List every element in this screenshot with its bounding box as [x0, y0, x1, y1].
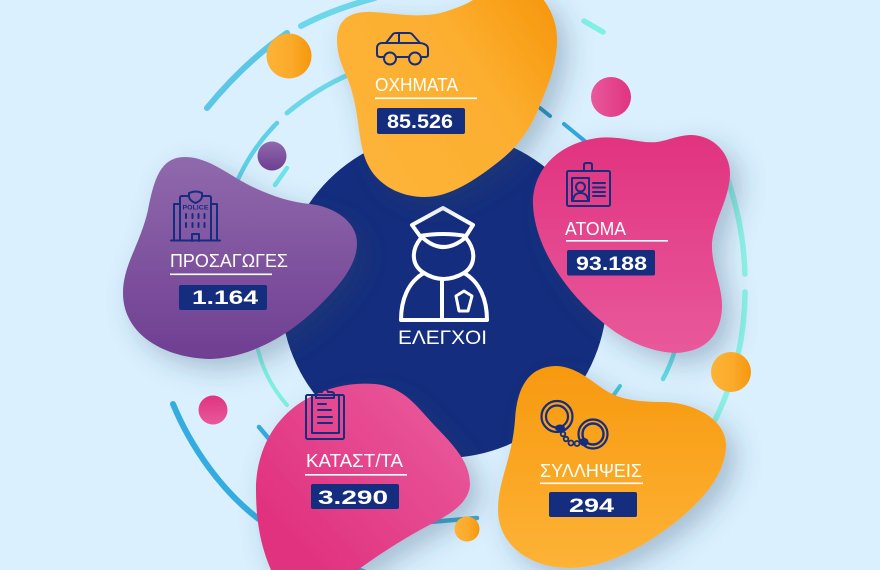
value box: establishments: [311, 484, 399, 509]
panel: establishments: [256, 384, 470, 570]
blob: orange top: [337, 0, 557, 197]
value box: vehicles: [377, 108, 465, 134]
label: establishments: ΚΑΤΑΣΤ/ΤΑ: [306, 451, 403, 471]
blob: pink right: [533, 135, 730, 353]
blob: purple left: [123, 157, 357, 359]
value box: arrests: [549, 492, 637, 517]
value box: persons: 93.188: [576, 254, 647, 275]
icon: handcuffs: [542, 401, 608, 448]
panel: arrests: [498, 366, 726, 568]
central navy circle: [281, 132, 607, 458]
blob: orange bottom: [498, 366, 726, 568]
label: persons: ΑΤΟΜΑ: [565, 219, 626, 239]
dashed rings: [173, 0, 745, 570]
underline: [305, 474, 407, 476]
center label: ΕΛΕΓΧΟΙ: [398, 328, 487, 349]
panel: detentions: [123, 157, 357, 359]
panel: vehicles: [337, 0, 557, 197]
icon: id card: [567, 163, 610, 206]
icon: car: [377, 33, 428, 64]
icon: police officer: [401, 208, 487, 320]
icon: police station: POLICE: [182, 206, 208, 212]
value box: persons: [567, 250, 655, 276]
label: arrests: ΣΥΛΛΗΨΕΙΣ: [540, 461, 642, 481]
label: vehicles: ΟΧΗΜΑΤΑ: [375, 75, 458, 95]
value box: detentions: [179, 285, 267, 310]
value box: establishments: 3.290: [318, 488, 388, 509]
value box: arrests: 294: [569, 496, 615, 517]
decorative dot: pink bottom left: [198, 396, 228, 424]
value box: vehicles: 85.526: [387, 112, 453, 133]
underline: [170, 274, 272, 275]
label: detentions: ΠΡΟΣΑΓΩΓΕΣ: [170, 251, 288, 271]
decorative dot: orange small: [454, 516, 480, 542]
panel: persons: [533, 135, 730, 353]
underline: [375, 98, 477, 99]
decorative dot: orange right: [711, 352, 751, 392]
underline: [566, 240, 668, 242]
decorative dot: orange top left: [266, 34, 312, 78]
underline: [540, 482, 643, 484]
decorative dot: purple: [258, 142, 286, 170]
icon: police station: [171, 192, 220, 241]
decorative dot: pink top right: [591, 77, 631, 117]
blob: pink bottom: [256, 384, 470, 570]
icon: clipboard: [306, 389, 344, 439]
value box: detentions: 1.164: [192, 288, 259, 309]
